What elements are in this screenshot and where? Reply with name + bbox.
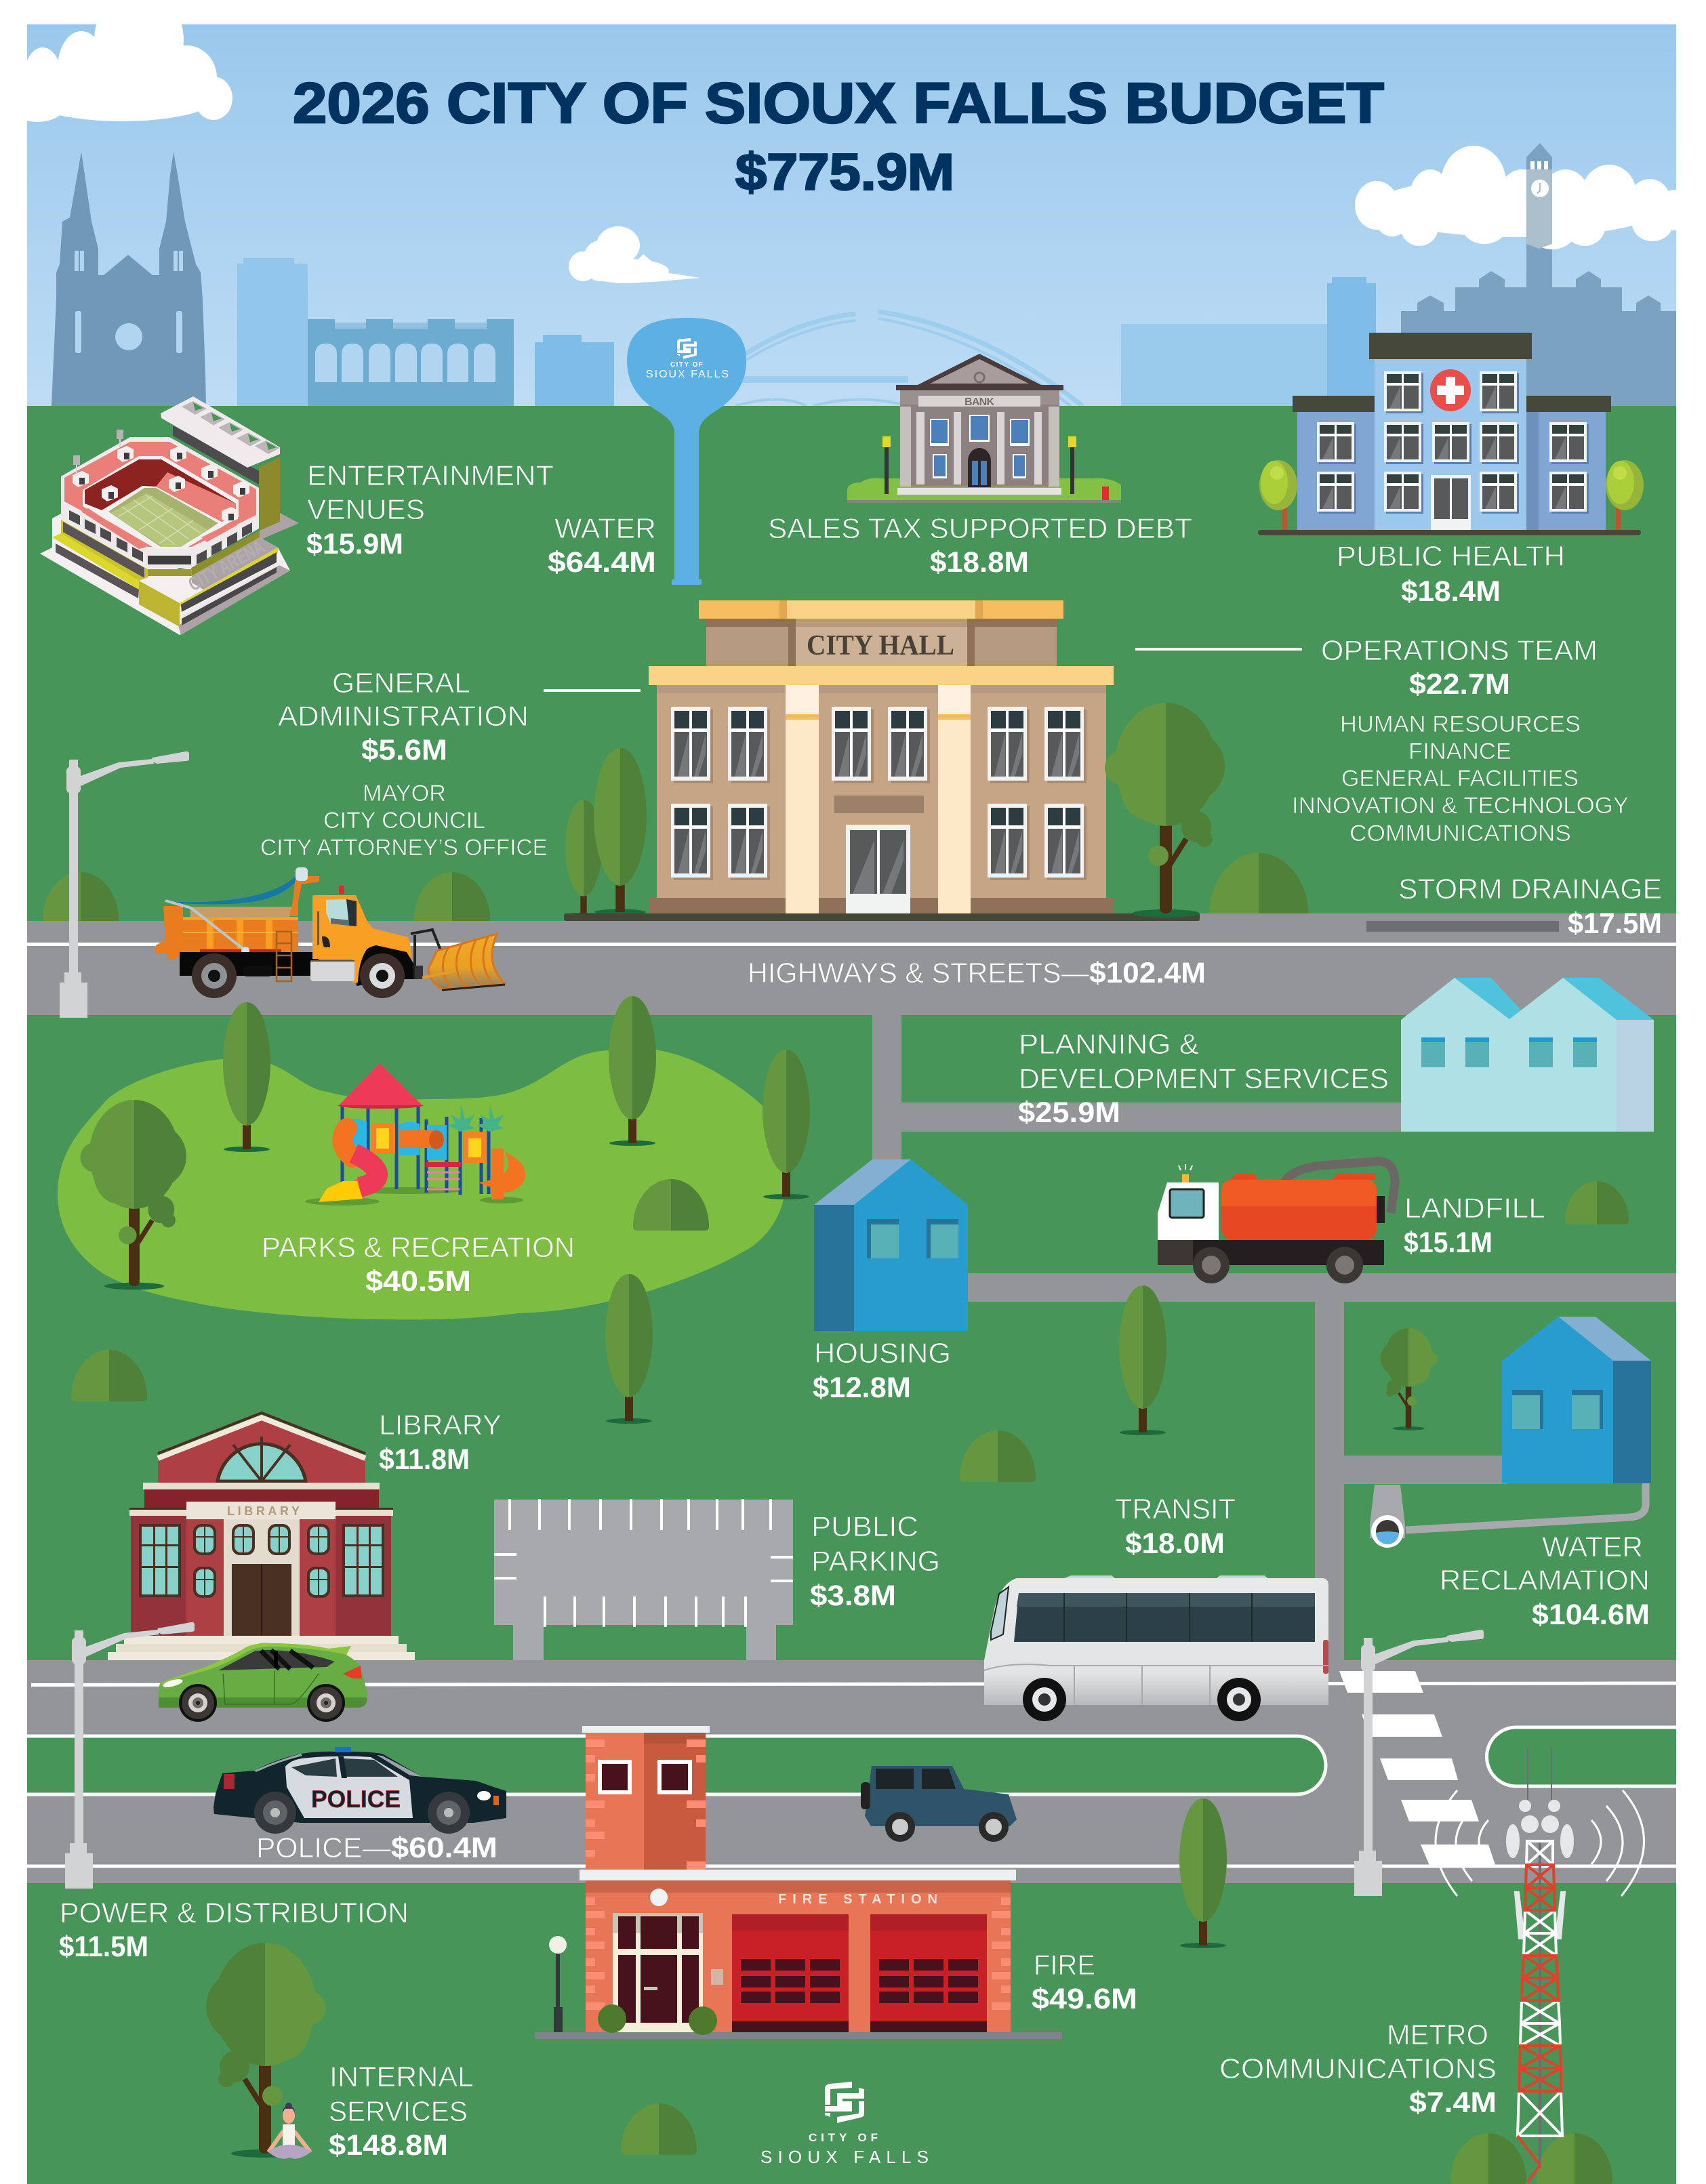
road median left xyxy=(14,1736,1326,1794)
label: housing: $12.8M xyxy=(813,1372,911,1404)
label: entertainment venues: ENTERTAINMENT xyxy=(307,459,554,491)
bank: sales tax supported debt xyxy=(847,354,1121,503)
label: water: WATER xyxy=(554,512,656,544)
label: operations team: COMMUNICATIONS xyxy=(1349,821,1571,846)
tree near reclamation house xyxy=(1381,1328,1438,1430)
label: operations team: HUMAN RESOURCES xyxy=(1340,712,1581,737)
tree: internal services xyxy=(206,1943,326,2158)
skyline: bridge xyxy=(735,312,1082,406)
label: police: POLICE— xyxy=(256,1832,391,1863)
tree: right of city hall xyxy=(1105,703,1225,918)
label: general administration: GENERAL xyxy=(332,667,470,699)
label: transit: TRANSIT xyxy=(1115,1493,1236,1525)
label: entertainment venues xyxy=(306,459,554,560)
label: public parking: PUBLIC xyxy=(811,1510,918,1542)
skyline: pale wide building xyxy=(1121,324,1327,406)
water tower: SIOUX FALLS xyxy=(646,369,729,380)
label: water reclamation xyxy=(1440,1531,1650,1631)
label: power and distribution: POWER & DISTRIBUTION xyxy=(60,1897,409,1929)
plow truck xyxy=(156,867,505,998)
label: planning and development services: PLANNING & xyxy=(1019,1028,1199,1060)
tree and bush centre xyxy=(960,1285,1166,1482)
police car xyxy=(214,1747,506,1834)
city logo bottom: SIOUX FALLS xyxy=(760,2147,929,2167)
label: transit: $18.0M xyxy=(1125,1527,1225,1560)
city hall building xyxy=(564,600,1200,921)
label: public parking: $3.8M xyxy=(810,1580,896,1612)
cloud: top right behind clock tower xyxy=(1355,146,1690,249)
police car: POLICE xyxy=(311,1786,401,1813)
label: storm drainage xyxy=(1398,873,1662,940)
label: water reclamation: RECLAMATION xyxy=(1440,1564,1650,1596)
label: sales tax supported debt: $18.8M xyxy=(930,546,1029,579)
label: power and distribution: $11.5M xyxy=(59,1931,148,1963)
label: fire: FIRE xyxy=(1034,1949,1095,1981)
label: public health xyxy=(1337,540,1565,608)
label: housing: HOUSING xyxy=(814,1337,951,1369)
house: water reclamation xyxy=(1502,1317,1651,1483)
stadium: entertainment venues xyxy=(40,396,299,635)
tree: small left of city hall xyxy=(565,800,602,917)
cloud: small centre xyxy=(569,226,700,283)
label: planning and development services xyxy=(1018,1028,1389,1129)
label: parks and recreation xyxy=(262,1231,575,1298)
green car xyxy=(158,1643,367,1722)
planning building xyxy=(1401,978,1654,1132)
roads: upper highway xyxy=(27,913,1676,1668)
fire station xyxy=(535,1726,1062,2039)
title: 2026 CITY OF SIOUX FALLS BUDGET xyxy=(293,71,1384,135)
green ground xyxy=(27,406,1676,2184)
label: planning and development services: DEVELOPMENT SERVICES xyxy=(1019,1063,1389,1094)
label: public parking xyxy=(810,1510,940,1612)
label: planning and development services: $25.9M xyxy=(1018,1096,1120,1129)
label: parks and recreation: PARKS & RECREATION xyxy=(262,1231,575,1263)
bush near landfill xyxy=(1565,1181,1629,1224)
label: highways and streets: $102.4M xyxy=(1089,957,1206,989)
label: landfill: LANDFILL xyxy=(1404,1192,1545,1224)
meditating person xyxy=(268,2103,312,2159)
stadium: entertainment venues: CITY ARENA xyxy=(185,536,268,595)
label: operations team: OPERATIONS TEAM xyxy=(1321,634,1598,666)
label: library: LIBRARY xyxy=(379,1409,502,1441)
bus xyxy=(984,1575,1328,1721)
bank: sales tax supported debt: BANK xyxy=(964,396,994,408)
parking lot xyxy=(494,1499,793,1660)
label: public parking: PARKING xyxy=(811,1545,940,1577)
label: fire: $49.6M xyxy=(1032,1983,1137,2015)
label: water reclamation: $104.6M xyxy=(1532,1599,1650,1631)
label: general administration: CITY ATTORNEY’S OFFICE xyxy=(260,835,548,861)
label: police xyxy=(256,1832,497,1864)
connector: general administration xyxy=(544,689,641,692)
label: general administration xyxy=(260,667,548,861)
house: housing xyxy=(814,1159,968,1331)
label: water: $64.4M xyxy=(548,546,656,579)
jeep xyxy=(861,1766,1017,1842)
playground xyxy=(305,1063,525,1206)
city logo bottom: CITY OF xyxy=(809,2131,878,2144)
skyline: low building xyxy=(535,335,614,406)
street lamp: upper xyxy=(60,751,189,1018)
communications tower xyxy=(1436,1747,1644,2182)
library: LIBRARY xyxy=(227,1504,300,1518)
label: operations team xyxy=(1292,634,1629,846)
label: metro communications xyxy=(1219,2019,1497,2119)
sky background xyxy=(27,24,1676,407)
skyline: cathedral xyxy=(52,152,206,406)
road median right xyxy=(1487,1727,1694,1786)
label: public health: $18.4M xyxy=(1401,575,1501,608)
label: internal services: SERVICES xyxy=(329,2095,468,2127)
label: public health: PUBLIC HEALTH xyxy=(1337,540,1565,572)
label: general administration: CITY COUNCIL xyxy=(323,808,485,833)
label: fire xyxy=(1032,1949,1137,2015)
park lawn xyxy=(58,1048,787,1319)
label: internal services: $148.8M xyxy=(329,2129,448,2162)
cloud: top left xyxy=(27,24,232,122)
skyline: courthouse with clock tower xyxy=(1401,143,1676,406)
fire station: FIRE STATION xyxy=(778,1892,937,1907)
water tower: CITY OF xyxy=(670,361,703,369)
label: internal services xyxy=(329,2061,474,2162)
label: metro communications: METRO xyxy=(1387,2019,1488,2051)
skyline: tower building xyxy=(237,258,308,406)
label: landfill: $15.1M xyxy=(1404,1227,1492,1259)
connector: operations team xyxy=(1135,648,1302,651)
skyline: arena building with arches xyxy=(308,319,514,406)
city logo bottom xyxy=(760,2082,929,2167)
label: library: $11.8M xyxy=(379,1443,470,1476)
skyline: right tower building xyxy=(1327,277,1376,406)
label: highways and streets: HIGHWAYS & STREETS— xyxy=(748,957,1089,989)
label: transit xyxy=(1115,1493,1236,1560)
crosswalk xyxy=(1339,1671,1496,1867)
hospital: public health xyxy=(1258,333,1644,535)
tree: tall left of city hall xyxy=(594,748,647,915)
label: landfill xyxy=(1404,1192,1545,1259)
tanker truck: landfill xyxy=(1158,1161,1395,1283)
label: operations team: FINANCE xyxy=(1408,739,1511,764)
water tower xyxy=(627,318,746,585)
sewer pipe xyxy=(1370,1483,1646,1548)
label: entertainment venues: $15.9M xyxy=(306,528,403,560)
park trees and bushes xyxy=(80,996,810,1290)
total budget: $775.9M xyxy=(735,144,954,201)
bushes and trees along upper road xyxy=(43,852,1308,924)
label: parks and recreation: $40.5M xyxy=(365,1265,471,1298)
street lamp: library side xyxy=(65,1622,195,1889)
label: operations team: GENERAL FACILITIES xyxy=(1341,766,1579,791)
bushes under tower xyxy=(1450,2133,1612,2184)
label: general administration: $5.6M xyxy=(361,734,447,766)
label: storm drainage: $17.5M xyxy=(1568,907,1662,940)
highway centre line xyxy=(27,943,1676,946)
label: general administration: MAYOR xyxy=(363,781,446,806)
tree and bush below park xyxy=(71,1274,653,1424)
label: library xyxy=(379,1409,502,1476)
label: metro communications: $7.4M xyxy=(1409,2086,1497,2119)
label: general administration: ADMINISTRATION xyxy=(278,700,529,732)
label: internal services: INTERNAL xyxy=(329,2061,474,2093)
label: sales tax supported debt: SALES TAX SUPPORTED DEBT xyxy=(768,512,1192,544)
label: metro communications: COMMUNICATIONS xyxy=(1219,2053,1497,2084)
label: operations team: $22.7M xyxy=(1409,668,1510,701)
tree on lower road xyxy=(1179,1798,1227,1948)
label: sales tax supported debt xyxy=(768,512,1192,579)
label: storm drainage: STORM DRAINAGE xyxy=(1398,873,1662,905)
label: police: $60.4M xyxy=(391,1832,497,1864)
label: water xyxy=(548,512,656,579)
storm drain bar xyxy=(1366,921,1559,932)
street lamp: intersection xyxy=(1354,1630,1484,1896)
label: operations team: INNOVATION & TECHNOLOGY xyxy=(1292,793,1629,819)
bush bottom xyxy=(621,2103,697,2155)
label: entertainment venues: VENUES xyxy=(307,493,425,525)
label: housing xyxy=(813,1337,951,1404)
city hall building: CITY HALL xyxy=(807,630,954,661)
label: water reclamation: WATER xyxy=(1542,1531,1643,1563)
library xyxy=(108,1413,415,1660)
label: power and distribution xyxy=(59,1897,409,1963)
road: lower main street xyxy=(27,1660,1676,1883)
